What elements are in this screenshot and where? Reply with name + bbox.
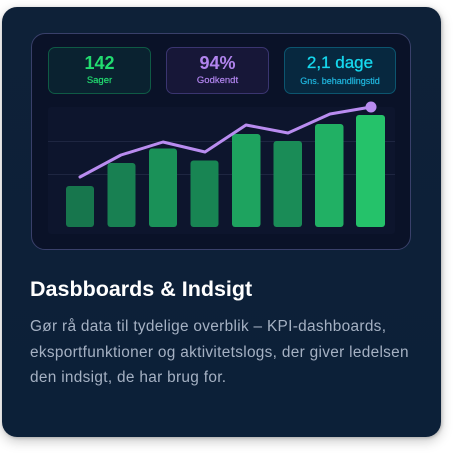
- KPI: Gns. behandlingstid: [284, 47, 396, 94]
- KPI: Godkendt: Godkendt: [197, 75, 238, 86]
- KPI: Sager: Sager: [87, 75, 112, 86]
- heading: Dasbboards & Indsigt: [30, 277, 252, 301]
- trend line: [80, 107, 371, 177]
- panel: dashboard: [31, 33, 411, 250]
- chart background: [48, 107, 395, 234]
- description: eksportfunktioner og aktivitetslogs, der giver ledelsen: [30, 344, 409, 361]
- KPI: Gns. behandlingstid: 2,1 dage: [307, 53, 373, 72]
- KPI: Gns. behandlingstid: Gns. behandlingstid: [300, 76, 380, 86]
- KPI: Sager: [48, 47, 151, 94]
- KPI: Godkendt: 94%: [199, 53, 236, 73]
- description: Gør rå data til tydelige overblik – KPI-dashboards,: [30, 318, 386, 335]
- KPI: Godkendt: [166, 47, 269, 94]
- line end dot: [366, 102, 376, 112]
- bars: [66, 115, 385, 227]
- description: den indsigt, de har brug for.: [30, 369, 226, 386]
- description: [30, 318, 409, 386]
- KPI: Sager: 142: [84, 53, 115, 73]
